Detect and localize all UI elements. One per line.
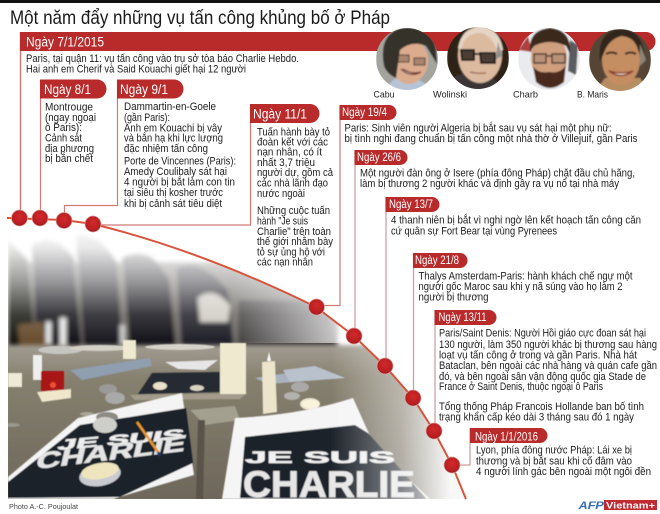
connector 13/11 <box>434 310 436 426</box>
thin candle <box>262 361 277 414</box>
text 8/1: (ngay ngoại <box>45 112 96 124</box>
date banner 7/1/2015 <box>20 32 656 51</box>
date pill 26/6 <box>354 150 408 165</box>
date pill 21/8 <box>413 253 468 268</box>
text 8/1: ô Paris): <box>45 122 82 134</box>
date pill 1/1/2016 <box>470 428 548 443</box>
ground <box>4 345 474 505</box>
panel: 11/1 <box>100 104 334 268</box>
date pill 9/1 <box>117 80 184 98</box>
connector 13/7 <box>385 197 387 360</box>
photo: candles and Je suis Charlie posters <box>4 225 474 505</box>
text 9/1 <box>124 101 236 210</box>
panel: 9/1: Ngày 9/1 <box>120 82 168 97</box>
panel: 9/1 <box>64 80 236 218</box>
date label 7/1/2015: Ngày 7/1/2015 <box>26 34 104 50</box>
text 1/1/2016: Lyon, phía đông nước Pháp: Lái xe bị <box>476 444 632 456</box>
text 8/1: Cảnh sát <box>45 132 82 144</box>
left poster <box>8 393 194 499</box>
panel: 1/1/2016: Ngày 1/1/2016 <box>475 432 538 444</box>
portrait: Wolinski <box>447 27 510 92</box>
text 9/1: và bắn hạ khi lực lượng <box>124 132 223 144</box>
portrait names: Charb <box>513 90 538 100</box>
date pill 13/11 <box>434 310 497 325</box>
panel: 13/7 <box>386 197 641 360</box>
left poster: JE SUIS <box>56 427 187 454</box>
text 11/1: đoàn kết với các <box>257 136 328 148</box>
text 8/1: bị bắn chết <box>45 152 93 165</box>
panel: 8/1: Ngày 8/1 <box>44 82 91 97</box>
text 19/4: Paris: Sinh viên người Algeria bị bắt sau vụ sát hại một phụ nữ: <box>344 122 612 134</box>
text 9/1: Dammartin-en-Goele <box>124 101 216 113</box>
text 8/1: Montrouge <box>45 102 93 114</box>
connector 26/6 <box>354 150 356 330</box>
text 11/1: nhất 3,7 triệu <box>257 157 315 169</box>
panel: 8/1 <box>40 80 106 216</box>
text 9/1: (gần Paris): <box>124 112 170 124</box>
panel: 26/6: Ngày 26/6 <box>357 152 401 164</box>
portrait names: B. Maris <box>577 90 608 100</box>
text 11/1: Tuấn hành bày tỏ <box>257 126 330 138</box>
text 9/1: Anh em Kouachi bị vây <box>124 122 222 134</box>
candle <box>123 340 136 359</box>
portrait: B. Maris <box>589 29 651 92</box>
text 13/11: France ở Saint Denis, thuộc ngoại ô Paris <box>439 381 603 393</box>
text 11/1 <box>257 126 334 268</box>
portrait names: Wolinski <box>433 90 467 100</box>
connector 19/4 <box>316 105 340 306</box>
text 11/1: nạn nhân, có ít <box>257 146 322 158</box>
photo credit: Photo A.-C. Poujoulat <box>9 502 79 511</box>
text 21/8: người bị thương <box>418 292 488 304</box>
text 11/1: Những cuộc tuấn <box>257 205 330 217</box>
text 13/7 <box>391 214 641 238</box>
title: Một năm đẩy những vụ tấn công khủng bố ở Pháp <box>10 7 390 29</box>
connector 1/1/2016 <box>452 428 470 465</box>
connector 8/1 <box>40 80 42 216</box>
top black bar <box>0 0 660 3</box>
timeline curve <box>7 218 466 499</box>
text 11/1: các nhà lãnh đạo <box>257 178 328 190</box>
text 9/1: 4 người bị bắt làm con tin <box>124 176 235 188</box>
tea lights and papers <box>70 358 152 380</box>
panel: 13/11: Ngày 13/11 <box>438 312 486 324</box>
text 11/1: người dự, gồm cả <box>257 167 334 179</box>
portrait names: Cabu <box>374 90 394 100</box>
text 21/8: Thalys Amsterdam-Paris: hành khách chế ngự một <box>418 270 632 282</box>
large candle <box>220 343 246 394</box>
text 7/1/2015: Paris, tại quận 11: vụ tấn công vào trụ sở tòa báo Charlie Hebdo. <box>26 53 299 65</box>
text 1/1/2016: thương và bị bắt sau khi cố đâm vào <box>476 454 632 468</box>
text 11/1: tỏ sự ủng hộ với <box>257 246 325 258</box>
right poster: JE SUIS <box>245 448 395 467</box>
panel: 13/7: Ngày 13/7 <box>389 199 433 211</box>
text 11/1: Charlie" trên toàn <box>257 226 331 238</box>
red glass candle <box>41 371 64 392</box>
text 11/1: thế giới nhằm bày <box>257 235 333 248</box>
date pill 11/1 <box>250 104 320 123</box>
portrait names <box>374 90 608 100</box>
panel: 21/8 <box>413 253 632 392</box>
text 9/1: khi bị cảnh sát tiêu diệt <box>124 198 222 210</box>
connector 11/1 <box>100 104 250 225</box>
panel: 19/4 <box>316 105 638 306</box>
crowd silhouettes <box>8 235 338 352</box>
panel: 11/1: Ngày 11/1 <box>253 106 307 122</box>
left poster: CHARLIE <box>34 430 189 474</box>
panel: 21/8: Ngày 21/8 <box>415 255 459 267</box>
right poster: CHARLIE <box>243 464 415 505</box>
date pill 13/7 <box>386 197 440 212</box>
text 13/11: loạt vụ tấn công ở trong và gần Paris. Nhà hát <box>439 350 637 362</box>
panel: 7/1/2015 <box>20 32 656 216</box>
logo: AFP Vietnam+: AFP <box>577 500 606 512</box>
text 9/1: Amedy Coulibaly sát hại <box>124 166 227 178</box>
text 11/1: hành "Je suis <box>257 216 308 228</box>
panel: 13/11 <box>434 310 657 426</box>
connector 7/1/2015 <box>20 32 22 216</box>
timeline markers <box>12 210 460 473</box>
connector 9/1 <box>64 80 118 218</box>
connector 21/8 <box>412 253 414 392</box>
portrait: Cabu <box>376 28 438 92</box>
text 26/6 <box>360 168 635 190</box>
text 21/8: người gốc Maroc sau khi y nã súng vào họ làm 2 <box>418 281 622 293</box>
text 1/1/2016 <box>476 444 651 478</box>
text 9/1: tại siêu thị kosher trước <box>124 187 223 199</box>
text 11/1: các nạn nhân <box>257 256 313 268</box>
text 7/1/2015 <box>26 53 299 76</box>
tray with poster <box>130 393 247 400</box>
text 9/1: đặc nhiệm tấn công <box>124 143 208 155</box>
date pill 8/1 <box>40 80 106 98</box>
panel: 26/6 <box>354 150 635 330</box>
pen <box>137 422 158 452</box>
text 19/4 <box>344 122 638 145</box>
text 7/1/2015: Hai anh em Cherif và Said Kouachi giết hại 12 người <box>26 64 246 76</box>
text 13/7: cứ quân sự Fort Bear tại vùng Pyrenees <box>391 226 557 238</box>
text 21/8 <box>418 270 632 304</box>
text 8/1 <box>45 102 96 165</box>
panel: 1/1/2016 <box>452 428 651 478</box>
logo: AFP Vietnam+: Vietnam+ <box>606 500 656 512</box>
text 13/11 <box>439 328 657 424</box>
text 26/6: làm bị thương 2 người khác và định gây ra vụ nổ tại nhà máy <box>360 178 619 190</box>
panel: 19/4: Ngày 19/4 <box>342 107 388 119</box>
portrait: Charb <box>518 28 580 90</box>
text 9/1: Porte de Vincennes (Paris): <box>124 156 236 168</box>
right poster <box>222 398 430 505</box>
logo: AFP Vietnam+ <box>577 500 657 512</box>
text 8/1: địa phương <box>45 143 94 155</box>
text 13/11: trạng khẩn cấp kéo dài 3 tháng sau đó 1 ngày <box>439 412 634 424</box>
text 11/1: nước ngoài <box>257 188 305 200</box>
tea light on poster <box>78 468 122 488</box>
date pill 19/4 <box>340 105 396 120</box>
